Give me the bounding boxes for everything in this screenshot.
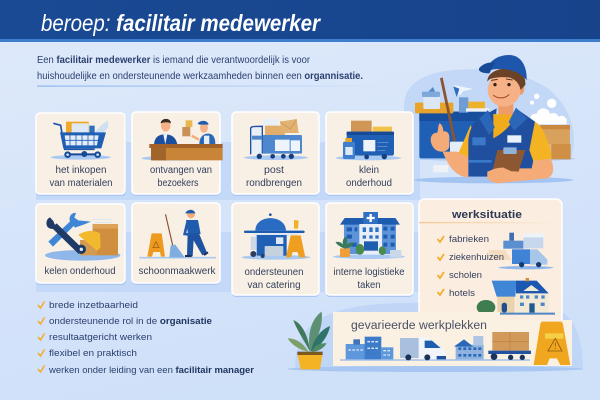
- heading: gevarieerde werkplekken: [351, 320, 487, 332]
- label: ondersteunen: [244, 267, 304, 278]
- icon: wet floor sign: [534, 322, 570, 365]
- soap foam: [530, 94, 567, 124]
- icon: pallet truck with boxes: [488, 332, 531, 360]
- icon: delivery van: [400, 337, 446, 360]
- icon: potted plant: [288, 312, 330, 369]
- list: scholen: [449, 270, 482, 281]
- list: kenmerken: [38, 300, 254, 376]
- card: kelen onderhoud: [36, 204, 126, 285]
- title: beroep: facilitair medewerker: [41, 10, 321, 36]
- bucket and supplies: [415, 77, 489, 172]
- card: het inkopen van materialen: van materialen: [50, 178, 112, 189]
- icon: factory: [340, 337, 530, 360]
- icon: mail cart: [244, 119, 308, 160]
- card: schoonmaakwerk: [132, 203, 220, 285]
- illustration: facilitair worker with cleaning supplies: [404, 55, 575, 183]
- card: interne logistieke taken: [326, 203, 413, 297]
- list: kenmerken: werken onder leiding van een facilitair manager: [48, 365, 254, 376]
- card: ondersteunen van catering: [232, 203, 319, 297]
- icon: reception desk with visitor: [142, 119, 223, 161]
- card: interne logistieke taken: taken: [358, 280, 380, 291]
- label: klein: [359, 165, 379, 176]
- list: kenmerken: resultaatgericht werken: [49, 332, 152, 343]
- icon: tool box with supplies: [336, 121, 401, 160]
- icon: factory and delivery van: [488, 233, 553, 269]
- intro text: huishoudelijke en ondersteunende werkzaamheden binnen een organnisatie.: [37, 71, 363, 82]
- card: klein onderhoud: [326, 112, 413, 196]
- worker: [431, 55, 553, 183]
- label: post: [264, 165, 284, 176]
- list: kenmerken: flexibel en praktisch: [49, 348, 137, 359]
- card: post rondbrengen: rondbrengen: [246, 178, 302, 189]
- cardboard boxes: [540, 125, 571, 159]
- header banner: [0, 0, 600, 42]
- intro text: Een facilitair medewerker is iemand die verantwoordelijk is voor: [37, 55, 311, 66]
- label: schoonmaakwerk: [138, 266, 216, 277]
- intro text: [37, 55, 392, 87]
- icon: cleaner with broom and wet floor sign: [139, 210, 216, 258]
- label: interne logistieke: [334, 267, 405, 278]
- plant shadow: [287, 366, 583, 372]
- panel: gevarieerde werkplekken: [333, 312, 572, 366]
- list: ziekenhuizen: [449, 252, 504, 263]
- card: ontvangen van bezoekers: [132, 112, 223, 196]
- label: ontvangen van: [150, 165, 212, 176]
- card: ondersteunen van catering: van catering: [248, 280, 300, 291]
- card: ontvangen van bezoekers: bezoekers: [158, 178, 198, 189]
- icon: school building: [477, 278, 555, 315]
- list: fabrieken: [449, 234, 489, 245]
- list: kenmerken: brede inzetbaarheid: [49, 300, 138, 311]
- label: het inkopen: [56, 165, 106, 176]
- label: kelen onderhoud: [44, 266, 116, 277]
- icon: catering cloche and trolley: [242, 213, 310, 260]
- background blob behind lower panels: [295, 303, 583, 369]
- card: het inkopen van materialen: [36, 113, 126, 196]
- icon: shopping cart: [51, 120, 111, 160]
- icon: crossed tools and box: [45, 213, 120, 261]
- list: [438, 234, 504, 299]
- heading: werksituatie: [451, 209, 522, 221]
- icon: hospital building: [333, 212, 405, 259]
- icon: office building: [454, 336, 484, 359]
- panel: werksituatie: [419, 199, 562, 329]
- card: post rondbrengen: [232, 112, 319, 196]
- list: kenmerken: ondersteunende rol in de organisatie: [49, 316, 212, 327]
- card: klein onderhoud: onderhoud: [346, 178, 392, 189]
- list: hotels: [449, 288, 475, 299]
